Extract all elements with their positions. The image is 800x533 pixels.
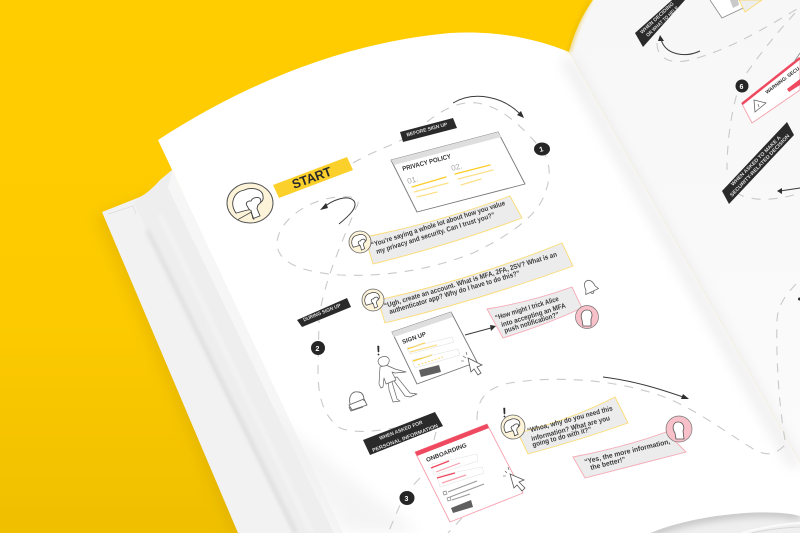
window: privacy policy: 02.: [450, 161, 463, 173]
bubble: attacker MFA quote: [487, 287, 598, 338]
label: before sign up: [400, 118, 457, 142]
onboarding button: [451, 500, 473, 513]
label: personal information: [363, 412, 443, 455]
window: onboarding: ONBOARDING: [426, 443, 468, 464]
right leg: [392, 377, 417, 397]
right page content: [635, 0, 800, 300]
number 2: [311, 341, 325, 355]
window: privacy policy: 01.: [406, 174, 419, 186]
number 1: 1: [539, 146, 544, 154]
form fields: [407, 337, 460, 368]
arrow: left loop: [320, 198, 355, 224]
bubble: why information quote: “Whoa, why do you need this: [527, 405, 614, 435]
gutter shadow: [566, 58, 796, 466]
avatar: attacker: [576, 306, 598, 328]
warning dialog: WARNING: SECU: [765, 66, 800, 96]
start banner: START: [290, 164, 334, 192]
bubble: why information quote: [501, 397, 628, 454]
bubble: attacker MFA quote: into accepting an MFA: [501, 303, 567, 329]
label: personal information: WHEN ASKED FOR: [379, 420, 424, 442]
page stack and spine: [102, 170, 345, 533]
sign up button: [419, 365, 441, 377]
person figure: [378, 357, 417, 402]
label: before sign up: BEFORE SIGN UP: [406, 122, 449, 138]
label: during sign up: DURING SIGN UP: [303, 303, 342, 323]
bubble: why information quote: going to do with it?”: [532, 426, 592, 449]
bubble: trust quote: “You're saying a whole lot about how you value: [370, 200, 506, 249]
icon: bell: [581, 278, 599, 296]
number 2: 2: [316, 346, 320, 353]
top window fragment: [710, 0, 762, 18]
avatar: attacker: [666, 416, 692, 442]
policy lines: [412, 165, 493, 197]
bubble: more information quote: “Yes, the more information,: [584, 439, 671, 466]
bubble: account quote: “Ugh, create an account. What is MFA, 2FA, 2SV? What is an: [384, 251, 558, 310]
arrow: sign up to attacker: [465, 325, 496, 335]
bubble: more information quote: [573, 416, 692, 478]
bubble: trust quote: [349, 196, 522, 264]
label: during sign up: [297, 298, 351, 327]
warning dialog: [742, 58, 800, 123]
bottom page edge: [650, 512, 800, 533]
avatar small: [501, 415, 525, 439]
head: [378, 357, 389, 366]
number 3: [400, 491, 414, 505]
arrow: top curve: [453, 96, 524, 118]
small connector arrow: [794, 53, 800, 62]
avatar: Alice start: [227, 183, 273, 223]
bubble: trust quote: my privacy and security. Can I trust you?”: [375, 212, 496, 256]
window: privacy policy: PRIVACY POLICY: [402, 153, 452, 173]
bubble: more information quote: the better!”: [590, 456, 626, 472]
avatar small: [362, 289, 384, 311]
window: sign up: [392, 312, 477, 384]
label: security decision: SECURITY-RELATED DECISION: [729, 133, 792, 198]
bubble: attacker MFA quote: “How might I trick Alice: [495, 296, 560, 322]
dashed journey path: [277, 9, 800, 533]
window: privacy policy: [391, 132, 525, 212]
icon: cursor signup: [461, 352, 482, 375]
label: personal information: PERSONAL INFORMATION: [372, 423, 439, 454]
label: security decision: WHEN ASKED TO MAKE A: [730, 135, 783, 187]
number 3: 3: [404, 496, 408, 503]
label: when deciding: [635, 0, 685, 47]
icon: lock: [349, 392, 367, 411]
icon: warning triangle: [754, 100, 766, 112]
exclamation mark: [504, 408, 505, 417]
arrow: lower right curve: [603, 377, 689, 399]
start banner: [273, 157, 353, 198]
onboarding form: [431, 454, 484, 501]
left page: [158, 32, 800, 533]
bubble: attacker MFA quote: push notification?”: [504, 312, 560, 335]
arrow: upper right curve: [658, 35, 700, 55]
window: sign up: SIGN UP: [402, 332, 427, 346]
number 6: [736, 80, 748, 92]
arrow tip: [798, 298, 800, 300]
left leg: [388, 378, 400, 402]
label: when deciding: OR WHAT TO HELP: [645, 5, 681, 38]
icon: cursor onboarding: [503, 467, 525, 491]
number 6: 6: [740, 84, 744, 91]
bubble: account quote: authenticator app? Why do I have to do this?”: [389, 270, 521, 316]
bubble: why information quote: information? What are you: [531, 415, 611, 443]
coat and arms: [379, 365, 406, 388]
window: onboarding: [415, 424, 523, 522]
right page: [569, 0, 800, 462]
arrow: right short: [777, 188, 800, 194]
label: when deciding: WHEN DECIDING: [639, 1, 676, 35]
exclamation mark: [378, 346, 379, 355]
label: security decision: [722, 122, 794, 204]
avatar small: [349, 231, 371, 253]
number 1: [534, 142, 550, 156]
